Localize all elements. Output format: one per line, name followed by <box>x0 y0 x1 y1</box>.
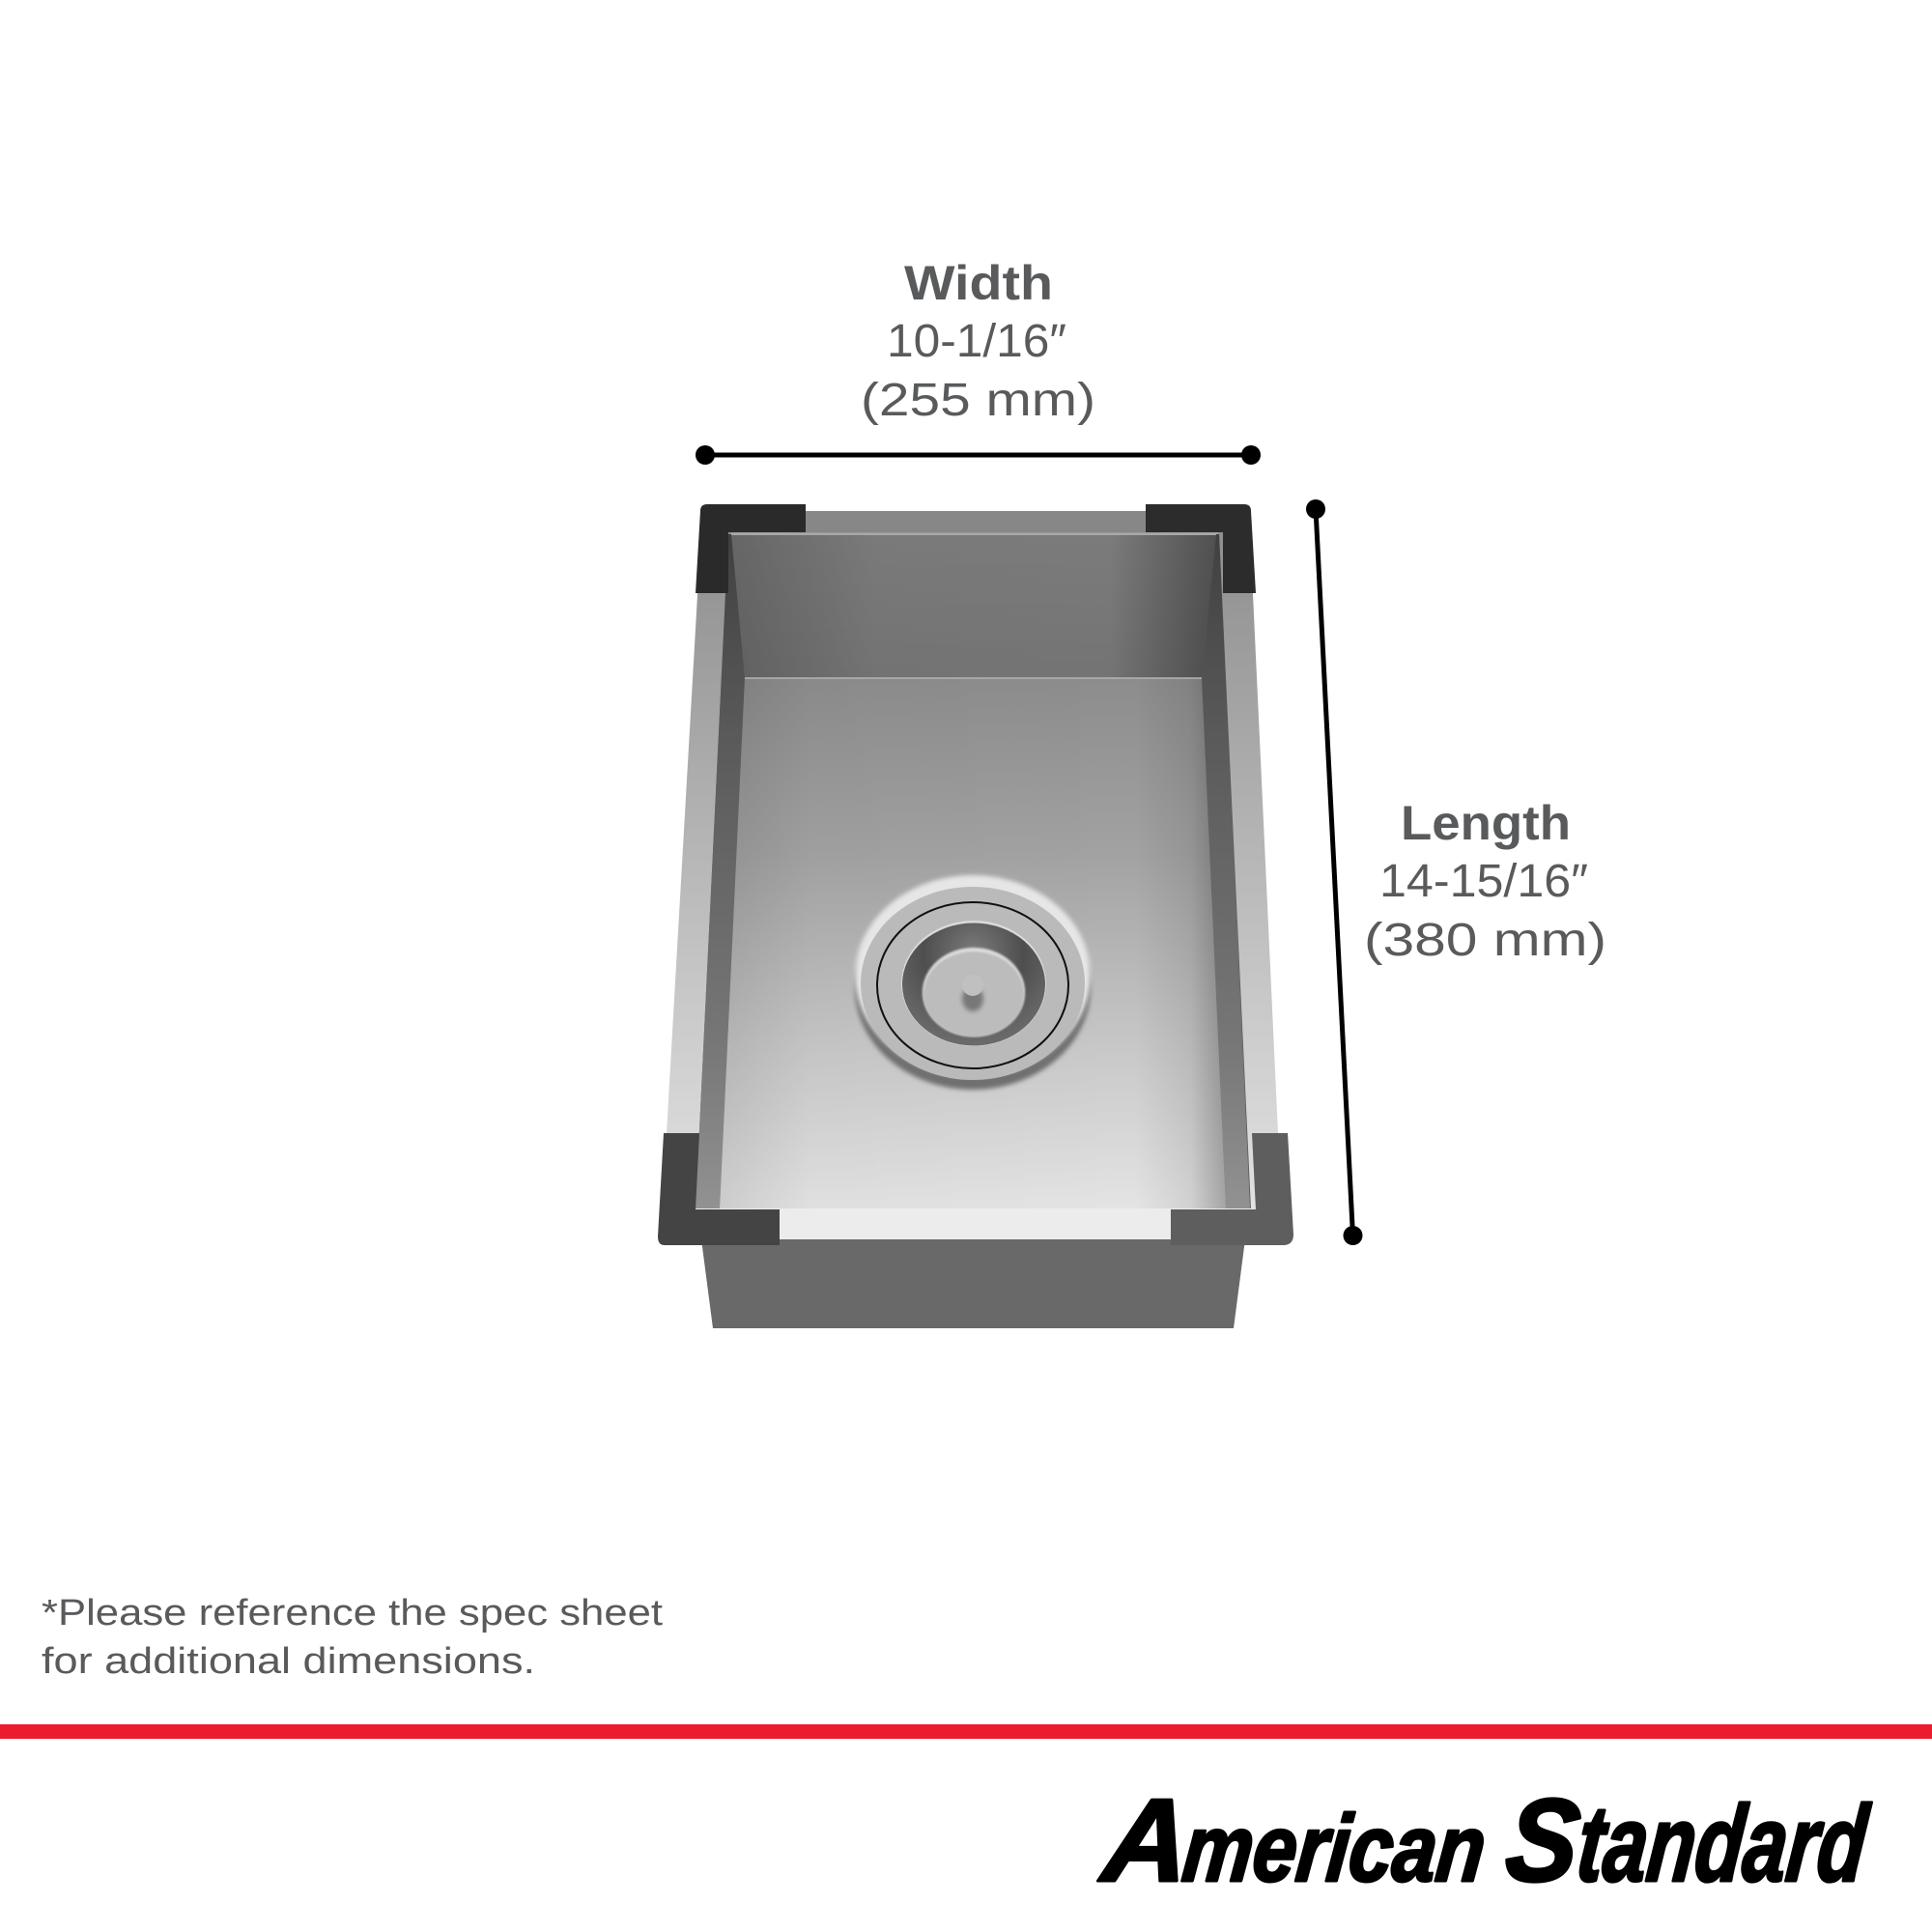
back rim <box>792 511 1159 534</box>
width label: Width <box>904 256 1053 310</box>
length dimension line <box>1306 499 1362 1245</box>
footnote: for additional dimensions. <box>42 1641 535 1682</box>
front rim <box>659 1208 1256 1239</box>
red divider bar <box>0 1724 1932 1739</box>
length label: (380 mm) <box>1364 915 1606 966</box>
left inner wall <box>696 534 745 1208</box>
logo: American Standard: A <box>1094 1774 1197 1906</box>
logo: American Standard <box>1094 1774 1874 1906</box>
interior underlay <box>696 534 1251 1209</box>
sink <box>658 504 1293 1328</box>
top-left corner clip <box>696 504 806 593</box>
length label: 14-15/16″ <box>1379 856 1588 907</box>
width label: 10-1/16″ <box>887 316 1066 367</box>
sink floor <box>720 678 1226 1208</box>
bottom-right corner clip <box>1171 1133 1293 1245</box>
width label: (255 mm) <box>861 375 1095 426</box>
rim base <box>659 511 1285 1239</box>
width dimension line <box>696 445 1261 465</box>
right inner wall <box>1202 534 1250 1208</box>
drain <box>855 875 1091 1090</box>
length label <box>1364 796 1606 966</box>
length label: Length <box>1401 796 1571 850</box>
footnote <box>42 1593 664 1682</box>
front outer wall <box>701 1239 1245 1328</box>
logo: American Standard: S <box>1500 1774 1586 1906</box>
logo: American Standard: merican <box>1179 1795 1491 1901</box>
top-right corner clip <box>1146 504 1256 593</box>
bottom-left corner clip <box>658 1133 780 1245</box>
footnote: *Please reference the spec sheet <box>42 1593 664 1634</box>
back wall <box>731 533 1218 678</box>
width label <box>861 256 1095 426</box>
